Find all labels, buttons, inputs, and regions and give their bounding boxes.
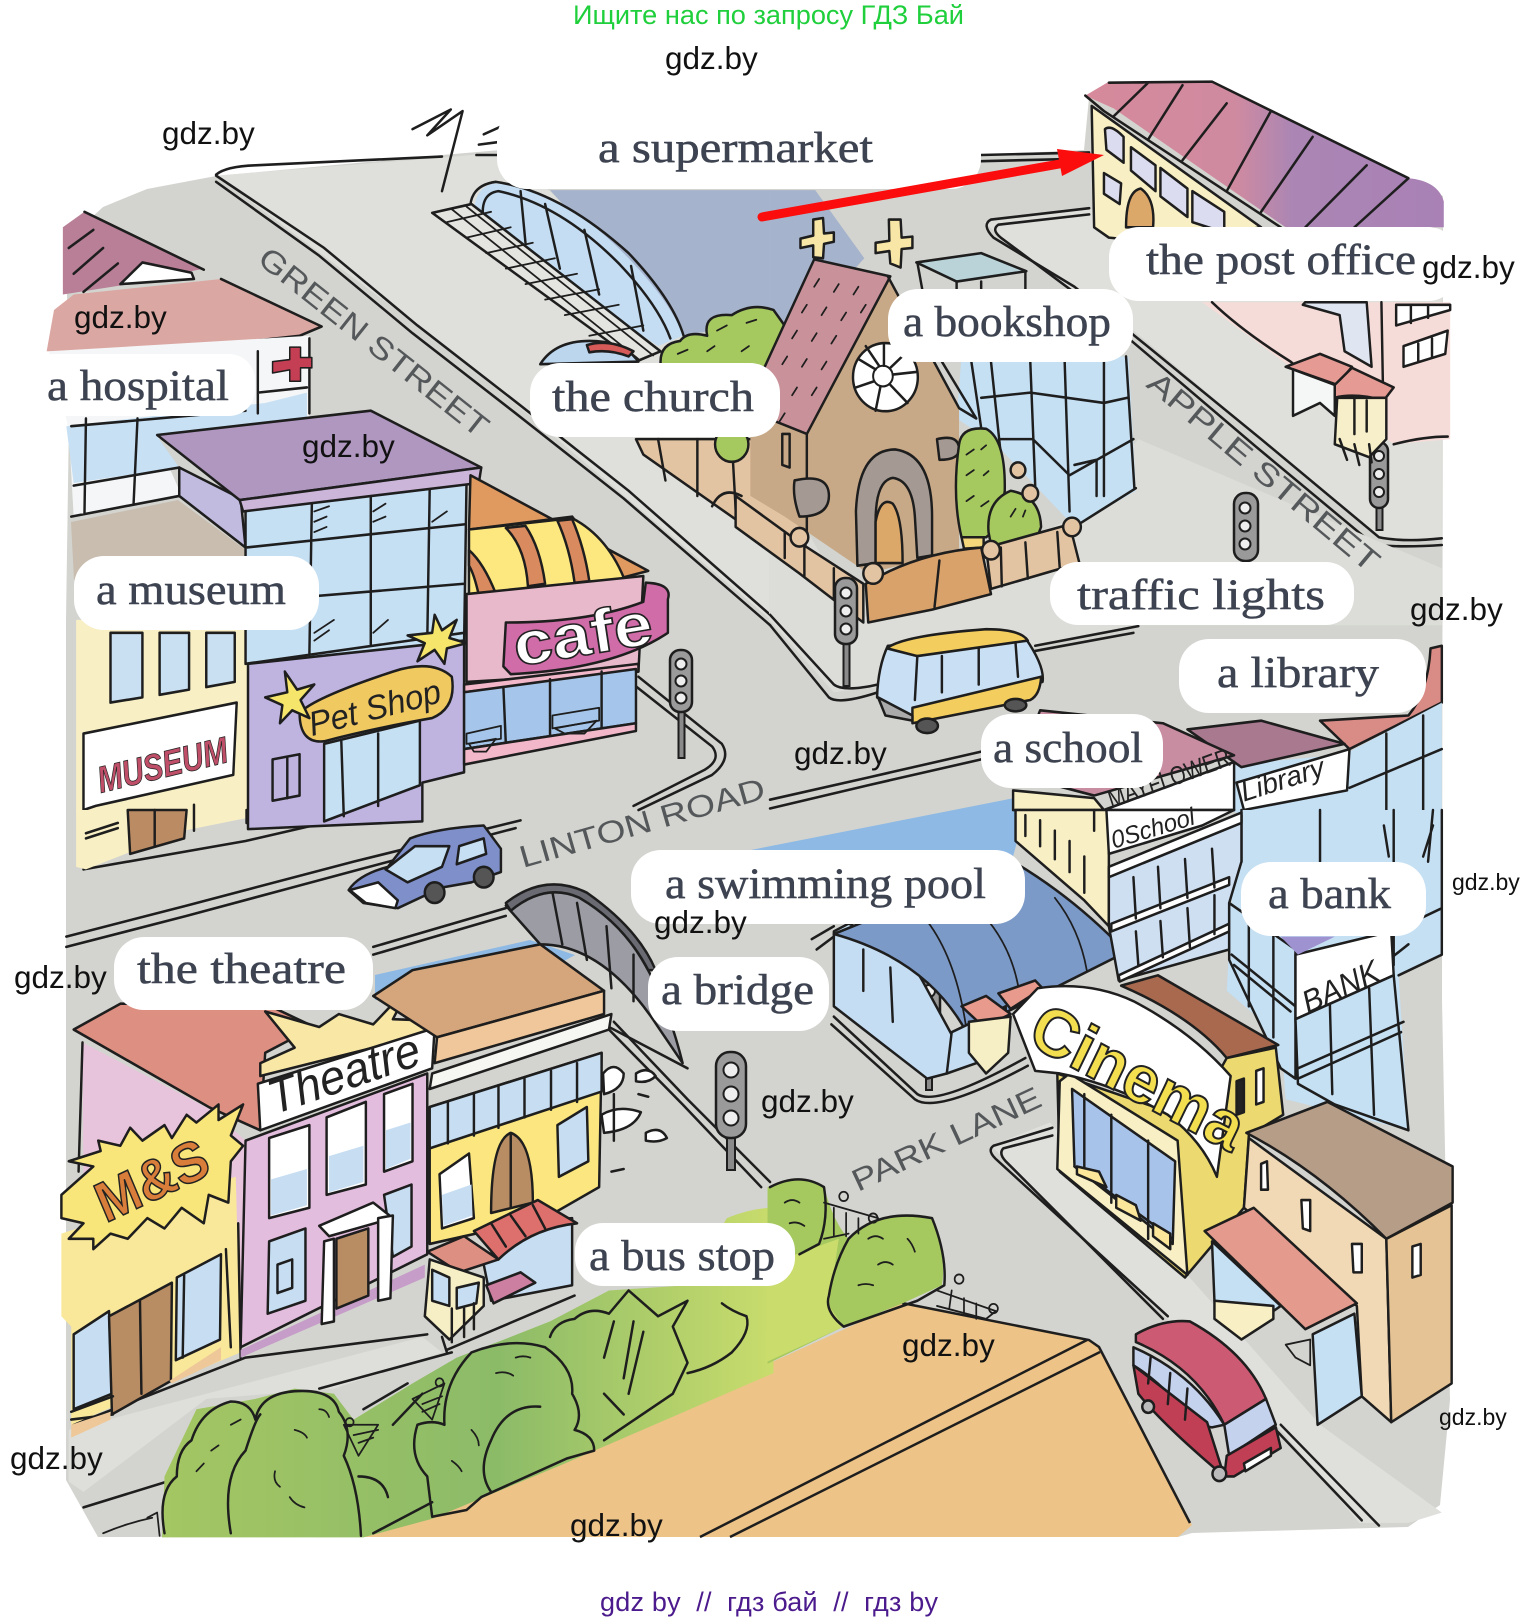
label: a hospital: a hospital <box>47 363 229 410</box>
watermarks: gdz.by <box>1439 1404 1507 1430</box>
label: the post office <box>1109 227 1458 301</box>
label: the church <box>530 363 780 437</box>
theatre row: M&S <box>86 1126 218 1235</box>
label: a bookshop <box>888 289 1133 362</box>
label: a bus stop <box>575 1223 795 1286</box>
label: a bank: a bank <box>1268 871 1392 918</box>
swimming pool water <box>375 795 1030 1000</box>
label: a library: a library <box>1217 650 1380 697</box>
watermarks: gdz.by <box>1410 591 1503 627</box>
label: a hospital <box>28 354 255 416</box>
blue car <box>349 825 501 908</box>
street name: Green Street: GREEN STREET <box>252 240 496 444</box>
label: a bridge: a bridge <box>661 967 814 1014</box>
M&S sign <box>61 1104 243 1249</box>
supermarket <box>413 110 864 364</box>
label: a swimming pool: a swimming pool <box>665 861 986 908</box>
theatre row: Theatre <box>261 1023 427 1126</box>
pet shop: Pet Shop <box>305 673 445 744</box>
church <box>636 218 1081 623</box>
tables <box>602 1067 641 1133</box>
watermarks: gdz.by <box>14 959 107 995</box>
trees and fences <box>103 1179 998 1537</box>
labels <box>28 108 1458 1286</box>
bus stop <box>484 1218 572 1301</box>
traffic light on Apple Street <box>1234 493 1258 561</box>
bridge <box>506 884 688 1068</box>
top banner text: Ищите нас по запросу ГДЗ Бай <box>573 0 964 30</box>
label: traffic lights <box>1050 562 1354 625</box>
watermarks: gdz.by <box>761 1083 854 1119</box>
label: a swimming pool <box>631 850 1025 924</box>
school, library and bank glass blocks <box>1013 646 1442 1130</box>
label: a supermarket: a supermarket <box>598 125 873 172</box>
watermarks: gdz.by <box>10 1440 103 1476</box>
cafe: cafe <box>508 589 657 680</box>
watermarks: gdz.by <box>1452 869 1520 895</box>
label: a museum: a museum <box>96 567 286 614</box>
label: a museum <box>74 556 319 630</box>
cafe <box>464 475 669 765</box>
cinema <box>1013 975 1283 1278</box>
museum: MUSEUM <box>93 728 232 801</box>
yellow building <box>373 944 604 1037</box>
traffic light by bridge <box>716 1052 746 1170</box>
traffic light by church <box>835 578 857 686</box>
tan building and red bus <box>1133 1102 1453 1481</box>
tan wall beside pet shop <box>71 500 246 580</box>
tree mass <box>162 1208 773 1537</box>
street name: Linton Road: LINTON ROAD <box>515 771 769 875</box>
watermarks: gdz.by <box>162 115 255 151</box>
road markings and sidewalks <box>66 152 1442 1525</box>
traffic lights <box>670 442 1388 1170</box>
hospital <box>47 212 322 517</box>
pet shop <box>157 411 481 829</box>
label: a bus stop: a bus stop <box>589 1233 775 1280</box>
watermarks: gdz.by <box>74 299 167 335</box>
side wall <box>83 1042 246 1347</box>
label: the theatre <box>114 937 373 1010</box>
footer links text: gdz by // гдз бай // гдз by <box>600 1587 938 1617</box>
street name: Apple Street: APPLE STREET <box>1141 365 1387 579</box>
label: a bridge <box>648 957 829 1031</box>
label: the church: the church <box>552 374 754 421</box>
watermarks: gdz.by <box>1422 249 1515 285</box>
yellow bus <box>877 629 1043 733</box>
label: a bank <box>1241 862 1426 936</box>
watermarks: gdz.by <box>570 1507 663 1543</box>
museum <box>76 620 324 869</box>
theatre front <box>241 1073 427 1347</box>
school, library and bank glass blocks: MAYFLOWER <box>1104 743 1234 814</box>
traffic light by pool <box>918 976 940 1090</box>
street name: Park Lane: PARK LANE <box>846 1080 1047 1198</box>
cinema: Cinema <box>1019 989 1258 1166</box>
bookshop <box>916 253 1136 527</box>
label: a supermarket <box>497 108 981 189</box>
swimming pool <box>812 862 1126 1079</box>
label: a school: a school <box>993 725 1143 772</box>
label: the theatre: the theatre <box>137 946 346 993</box>
school, library and bank glass blocks: BANK <box>1297 953 1386 1021</box>
label: a bookshop: a bookshop <box>903 299 1111 346</box>
label: traffic lights: traffic lights <box>1077 572 1325 619</box>
school, library and bank glass blocks: Library <box>1237 750 1329 808</box>
salmon roof <box>74 1004 314 1130</box>
watermarks: gdz.by <box>654 904 747 940</box>
label: a school <box>981 714 1163 788</box>
M&S shop <box>61 1177 241 1425</box>
tan foreground roof <box>363 1303 1192 1537</box>
label: the post office: the post office <box>1146 237 1416 284</box>
traffic light by cafe <box>670 650 692 758</box>
school, library and bank glass blocks: 0School <box>1108 803 1199 855</box>
label: a library <box>1179 639 1426 713</box>
traffic light by post office <box>1370 442 1388 530</box>
theatre row <box>61 944 667 1438</box>
post office <box>1085 82 1450 465</box>
watermarks: gdz.by <box>302 428 395 464</box>
street names <box>252 240 1387 1198</box>
arrow: red pointer to the supermarket <box>762 149 1104 217</box>
watermarks: gdz.by <box>902 1327 995 1363</box>
watermarks: gdz.by <box>665 40 758 76</box>
watermarks: gdz.by <box>794 735 887 771</box>
